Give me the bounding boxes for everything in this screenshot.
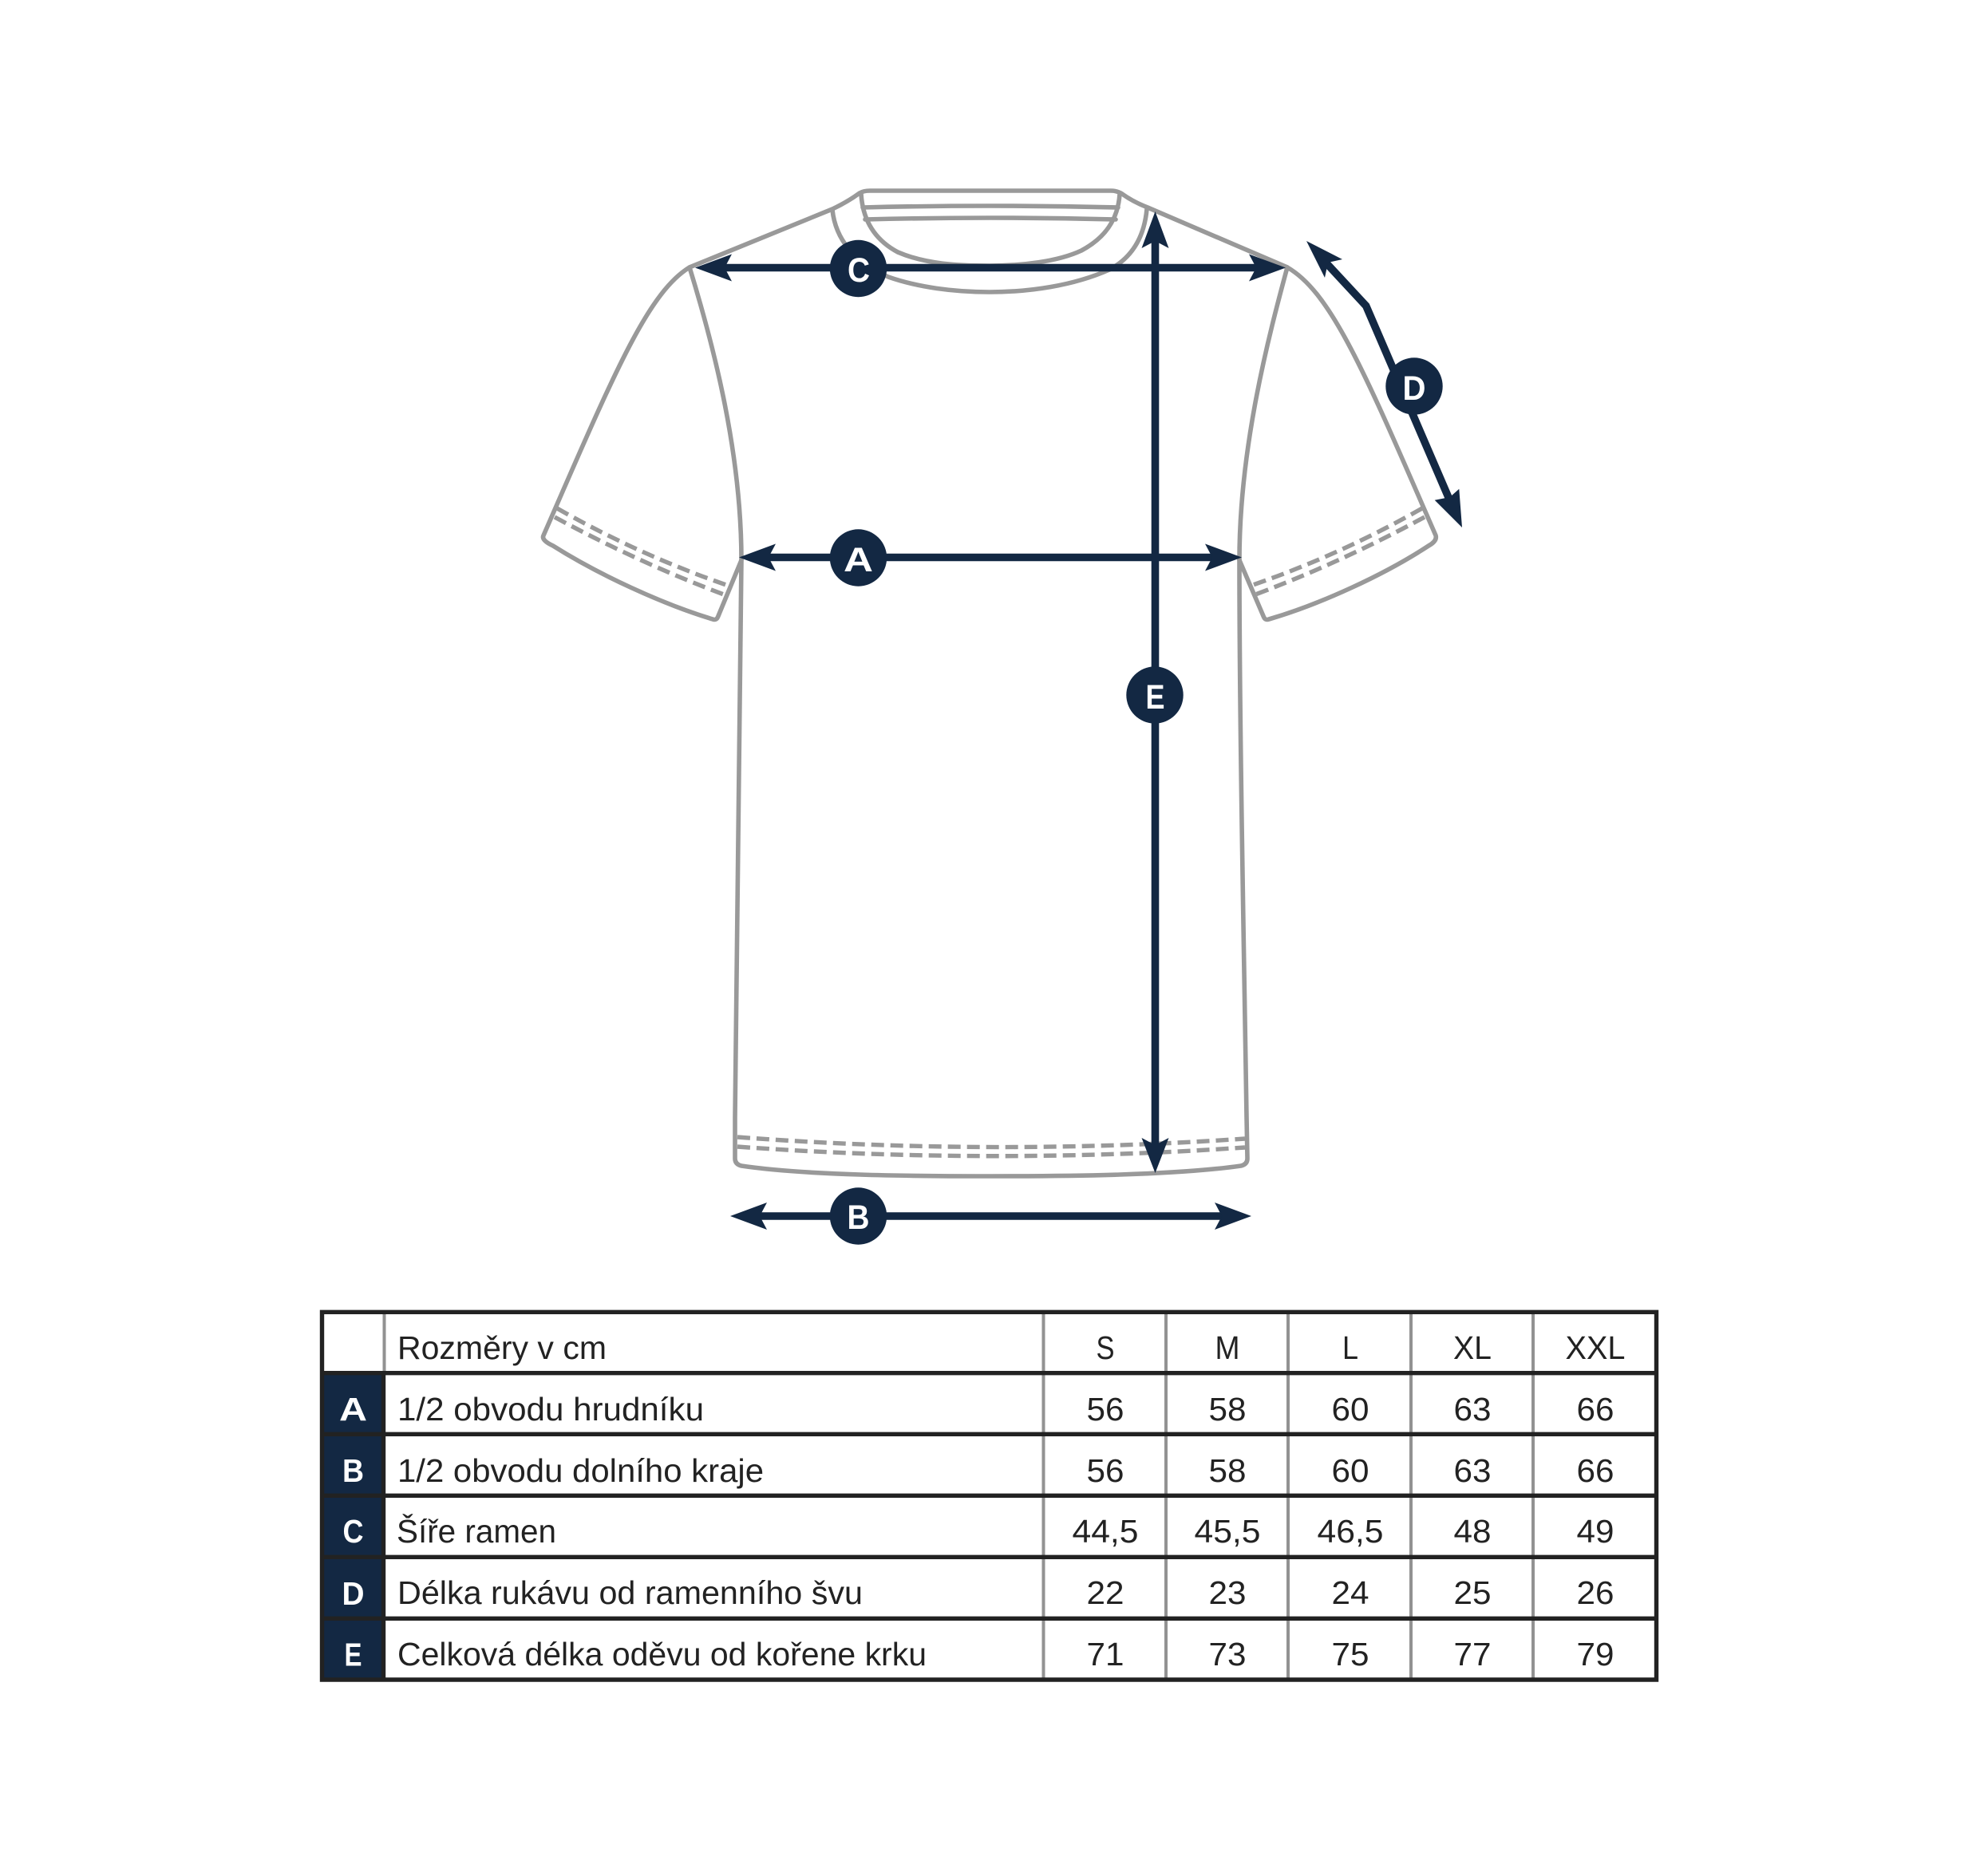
arrow E: total length (1126, 211, 1184, 1173)
header row: M (1215, 1329, 1240, 1366)
row C: 45,5 (1194, 1513, 1261, 1550)
header row (397, 1329, 1625, 1366)
row C: C (343, 1513, 364, 1550)
row E: 77 (1454, 1636, 1491, 1673)
row A: 63 (1454, 1391, 1491, 1428)
collar outer edge (832, 209, 1147, 292)
row C: 48 (1454, 1513, 1491, 1550)
header row: XL (1453, 1329, 1492, 1366)
row D: 26 (1577, 1574, 1614, 1611)
row A: 58 (1208, 1391, 1247, 1428)
header row: XXL (1566, 1329, 1625, 1366)
row E: 75 (1331, 1636, 1369, 1673)
row A (339, 1391, 1614, 1428)
hem stitching (737, 1137, 1245, 1156)
arrow B: half hem (730, 1187, 1251, 1245)
row B: 58 (1208, 1452, 1247, 1489)
row E: 79 (1577, 1636, 1614, 1673)
row D: 23 (1208, 1574, 1247, 1611)
row E (345, 1636, 1614, 1673)
body and sleeves silhouette (543, 191, 1436, 1176)
right sleeve stitching (1253, 508, 1425, 594)
neckline inner edge (861, 194, 1120, 266)
row B: 56 (1087, 1452, 1124, 1489)
row D: 24 (1331, 1574, 1369, 1611)
row D: Délka rukávu od ramenního švu (397, 1574, 863, 1611)
row B: 63 (1454, 1452, 1491, 1489)
table grey column lines (385, 1312, 1533, 1680)
row D: 25 (1454, 1574, 1491, 1611)
row E: 71 (1087, 1636, 1124, 1673)
row B: 1/2 obvodu dolního kraje (397, 1452, 764, 1489)
left sleeve stitching (555, 508, 726, 594)
row B: 60 (1331, 1452, 1369, 1489)
row B: B (342, 1452, 364, 1489)
row C: 46,5 (1317, 1513, 1384, 1550)
row E: E (345, 1636, 362, 1673)
header row: S (1097, 1329, 1114, 1366)
arrow B: half hem: B (848, 1199, 870, 1237)
row A: 66 (1577, 1391, 1614, 1428)
row letter column: navy cells (320, 1373, 385, 1680)
row D (342, 1574, 1614, 1612)
arrow A: half chest: A (844, 541, 873, 579)
row B (342, 1452, 1614, 1489)
header row: Rozměry v cm (397, 1329, 607, 1366)
row A: 60 (1331, 1391, 1369, 1428)
row B: 66 (1577, 1452, 1614, 1489)
arrow C: shoulder width (695, 240, 1286, 297)
row A: 56 (1087, 1391, 1124, 1428)
right armhole seam (1239, 267, 1287, 560)
row E: Celková délka oděvu od kořene krku (397, 1636, 927, 1673)
row C: 49 (1577, 1513, 1614, 1550)
back collar lines (863, 206, 1118, 219)
row D: 22 (1087, 1574, 1124, 1611)
left armhole seam (690, 267, 741, 560)
row C (343, 1513, 1614, 1550)
table dark rules and frame (322, 1312, 1657, 1680)
row A: 1/2 obvodu hrudníku (397, 1391, 704, 1428)
row D: D (342, 1575, 364, 1612)
row E: 73 (1208, 1636, 1247, 1673)
arrow D: sleeve length (1306, 241, 1462, 527)
t-shirt outline (543, 191, 1436, 1176)
arrow C: shoulder width: C (848, 251, 870, 290)
arrow A: half chest (739, 529, 1242, 586)
row A: A (339, 1391, 367, 1428)
arrow D: sleeve length: D (1403, 369, 1425, 408)
header row: L (1342, 1329, 1358, 1366)
arrow E: total length: E (1146, 678, 1165, 717)
row C: 44,5 (1073, 1513, 1138, 1550)
size table (320, 1312, 1657, 1680)
row C: Šíře ramen (397, 1513, 556, 1550)
